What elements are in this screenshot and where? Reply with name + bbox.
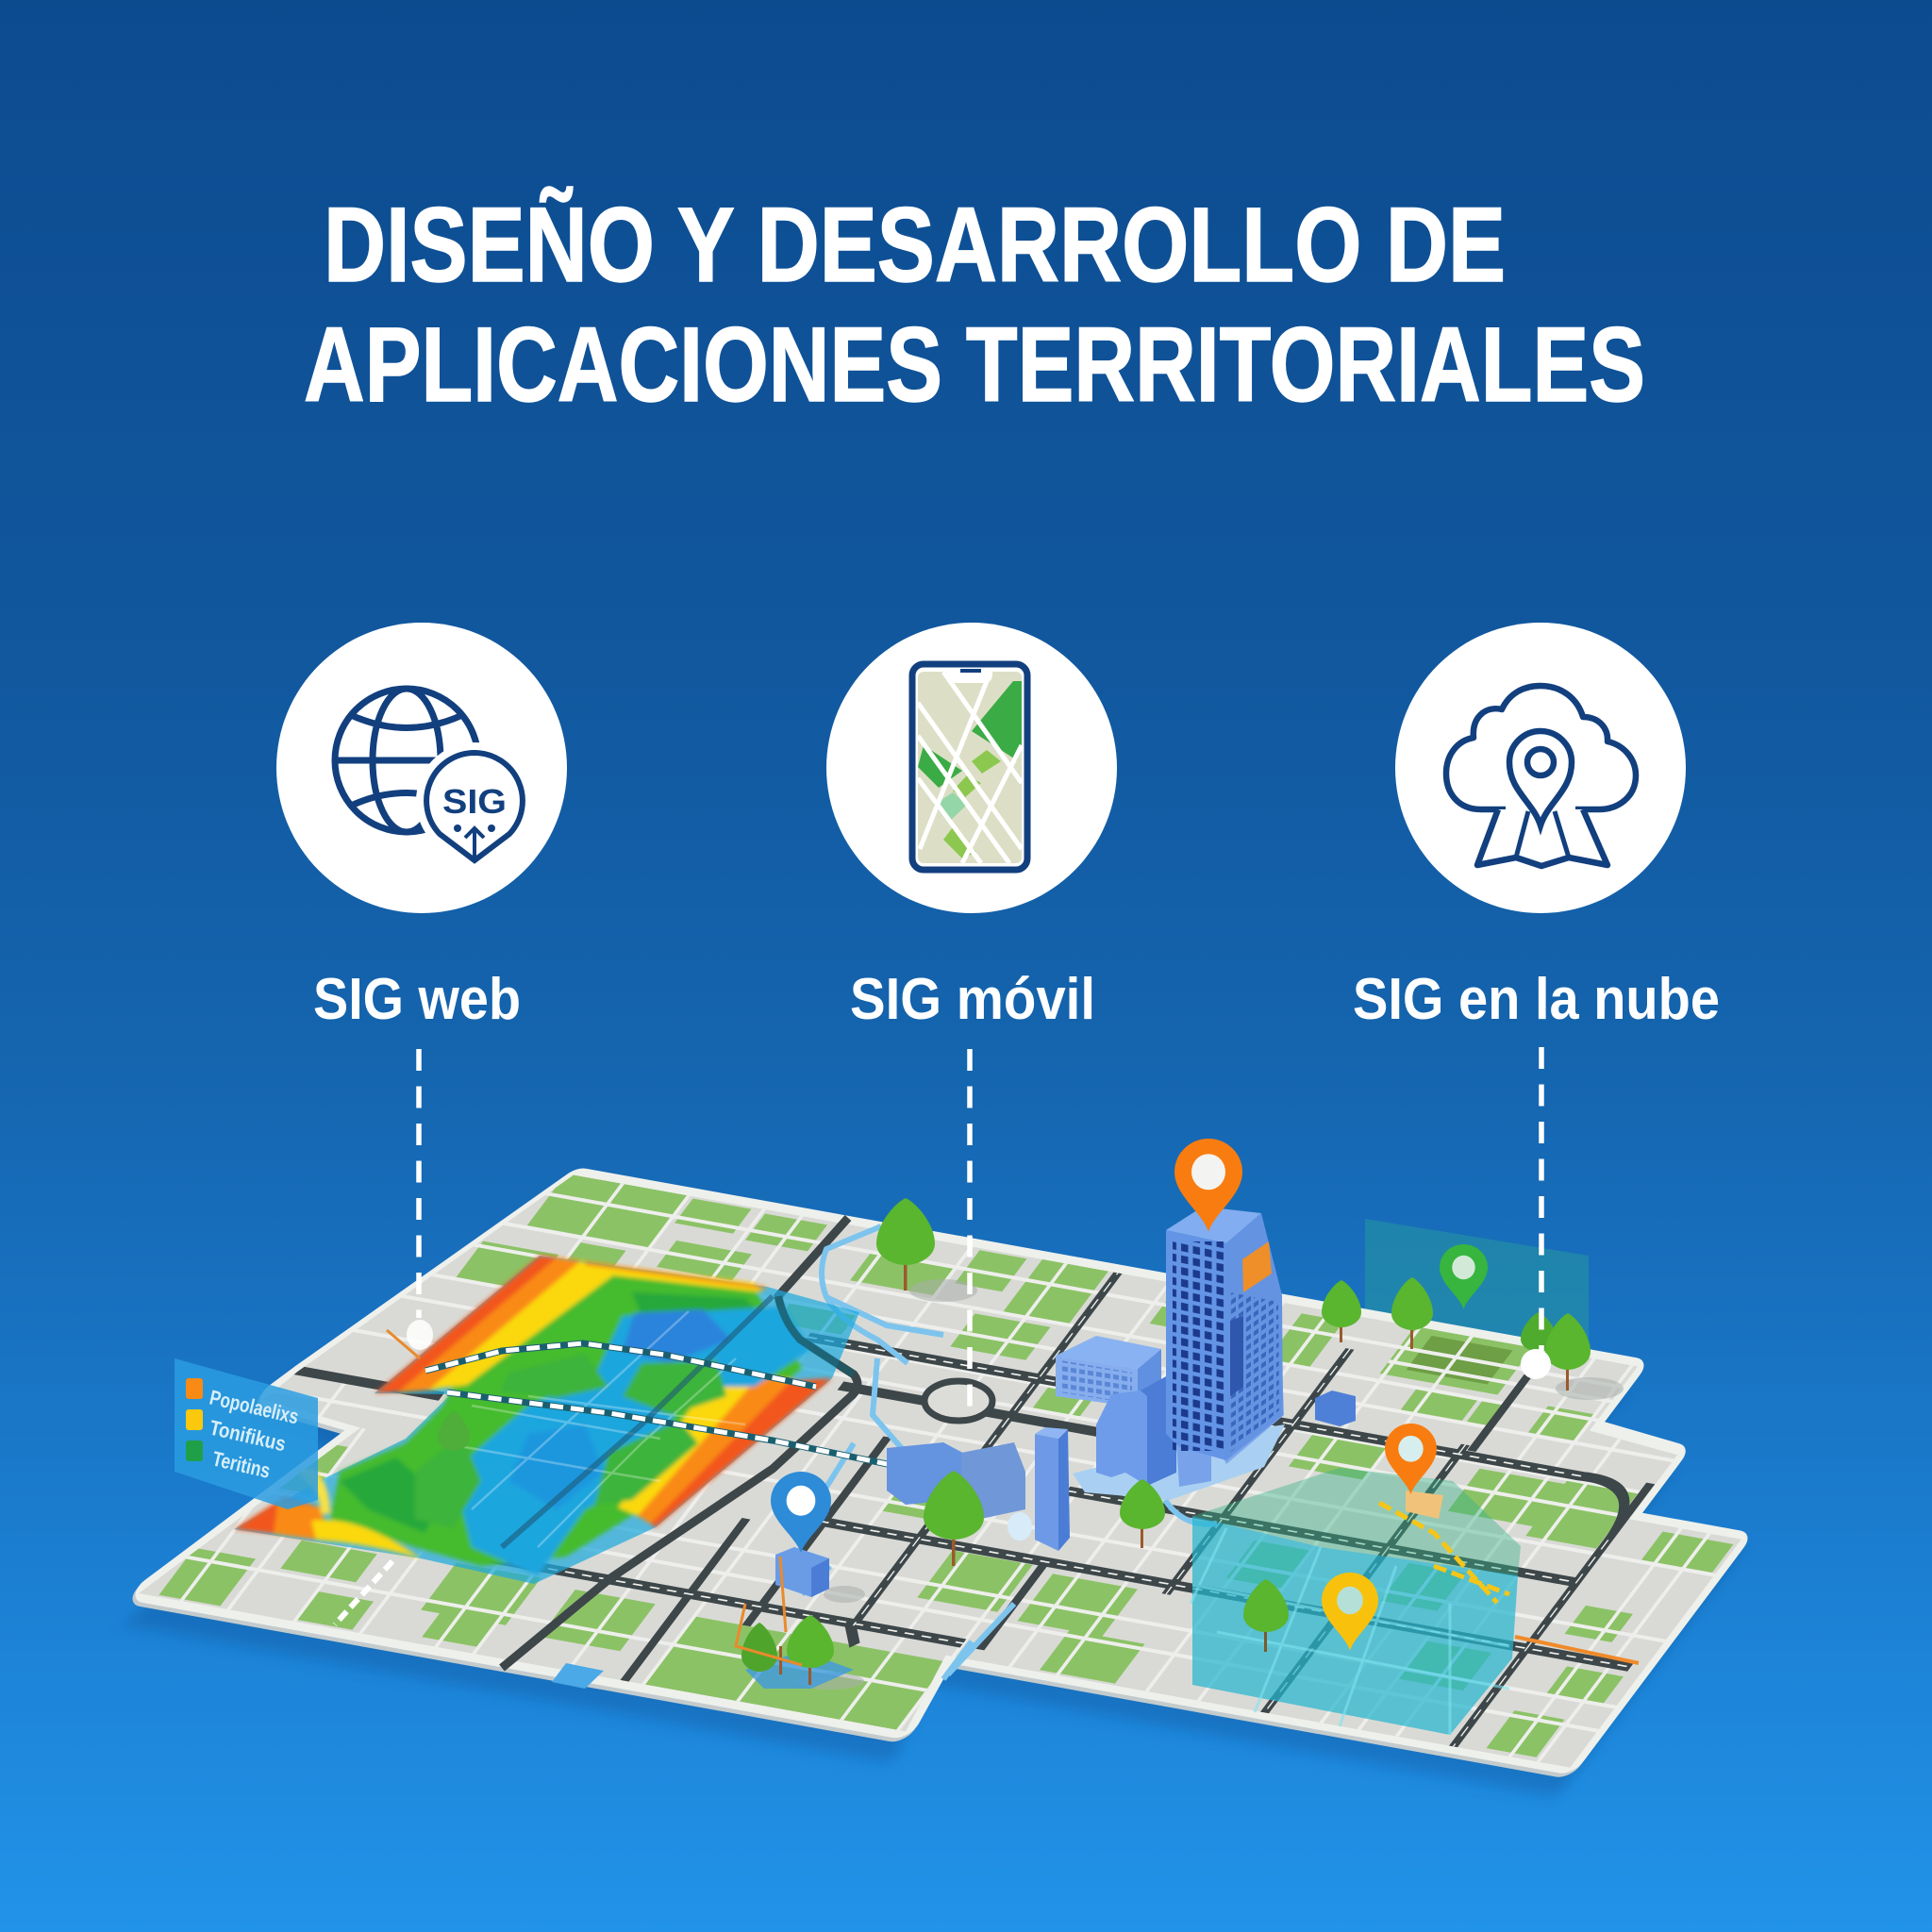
- title: APLICACIONES TERRITORIALES: [304, 306, 1645, 424]
- dashed connector: SIG móvil: [967, 1049, 973, 1415]
- floating teal data panel behind map: [1365, 1219, 1589, 1368]
- road: main curved avenue: [502, 1218, 858, 1668]
- icon: SIG web globe: SIG: [442, 782, 507, 821]
- tree on heatmap: [438, 1411, 470, 1451]
- dashed connector: SIG en la nube: [1539, 1047, 1544, 1358]
- pin: orange on tower: [1174, 1139, 1242, 1232]
- river: [802, 1226, 1217, 1679]
- building cluster: [1056, 1336, 1285, 1500]
- legend panel: [175, 1358, 318, 1509]
- tree 8: [1243, 1579, 1289, 1652]
- tree 5: [1545, 1313, 1591, 1391]
- label: SIG web: SIG web: [313, 967, 521, 1032]
- tree 3: [1391, 1277, 1433, 1349]
- icon: SIG web globe: [276, 623, 567, 913]
- tree 7: [1120, 1479, 1165, 1548]
- legend panel: Popolaelixs: [208, 1386, 301, 1428]
- building shadows: [796, 1279, 1624, 1690]
- pin: blue: [771, 1472, 831, 1553]
- isometric city map platform: [129, 1168, 1747, 1798]
- icon: SIG en la nube cloud pin and map: [1395, 623, 1686, 913]
- label: SIG en la nube: SIG en la nube: [1353, 967, 1720, 1032]
- water pond: [552, 1663, 604, 1689]
- heatmap overlay: [234, 1256, 906, 1624]
- road: roundabout: [924, 1381, 992, 1421]
- title: [304, 186, 1645, 424]
- legend panel: Tonifikus: [208, 1416, 288, 1456]
- label: SIG móvil: SIG móvil: [850, 967, 1095, 1032]
- tree 2: [1322, 1280, 1361, 1342]
- legend panel: Teritins: [210, 1447, 273, 1483]
- icon: SIG móvil phone with map: [826, 623, 1117, 913]
- dashed connector: SIG web: [416, 1049, 422, 1318]
- pin: orange mid: [1385, 1424, 1437, 1494]
- translucent data box lower right: [1191, 1468, 1639, 1735]
- low blue buildings left of tower: [887, 1427, 1070, 1551]
- tree 1: [876, 1198, 935, 1291]
- pin: yellow: [1322, 1573, 1378, 1651]
- blue house near pin: [775, 1547, 829, 1597]
- pin: green: [1440, 1244, 1488, 1309]
- title: DISEÑO Y DESARROLLO DE: [324, 186, 1506, 304]
- connector end point: SIG en la nube: [1521, 1349, 1551, 1379]
- connector end point: SIG web: [407, 1320, 433, 1350]
- park trees: [741, 1615, 854, 1689]
- small blue block: [1315, 1391, 1356, 1426]
- thin orange connector lines: [387, 1330, 802, 1665]
- tree 6: [924, 1471, 984, 1566]
- tree 4: [1521, 1312, 1557, 1352]
- tower building: [1166, 1207, 1283, 1460]
